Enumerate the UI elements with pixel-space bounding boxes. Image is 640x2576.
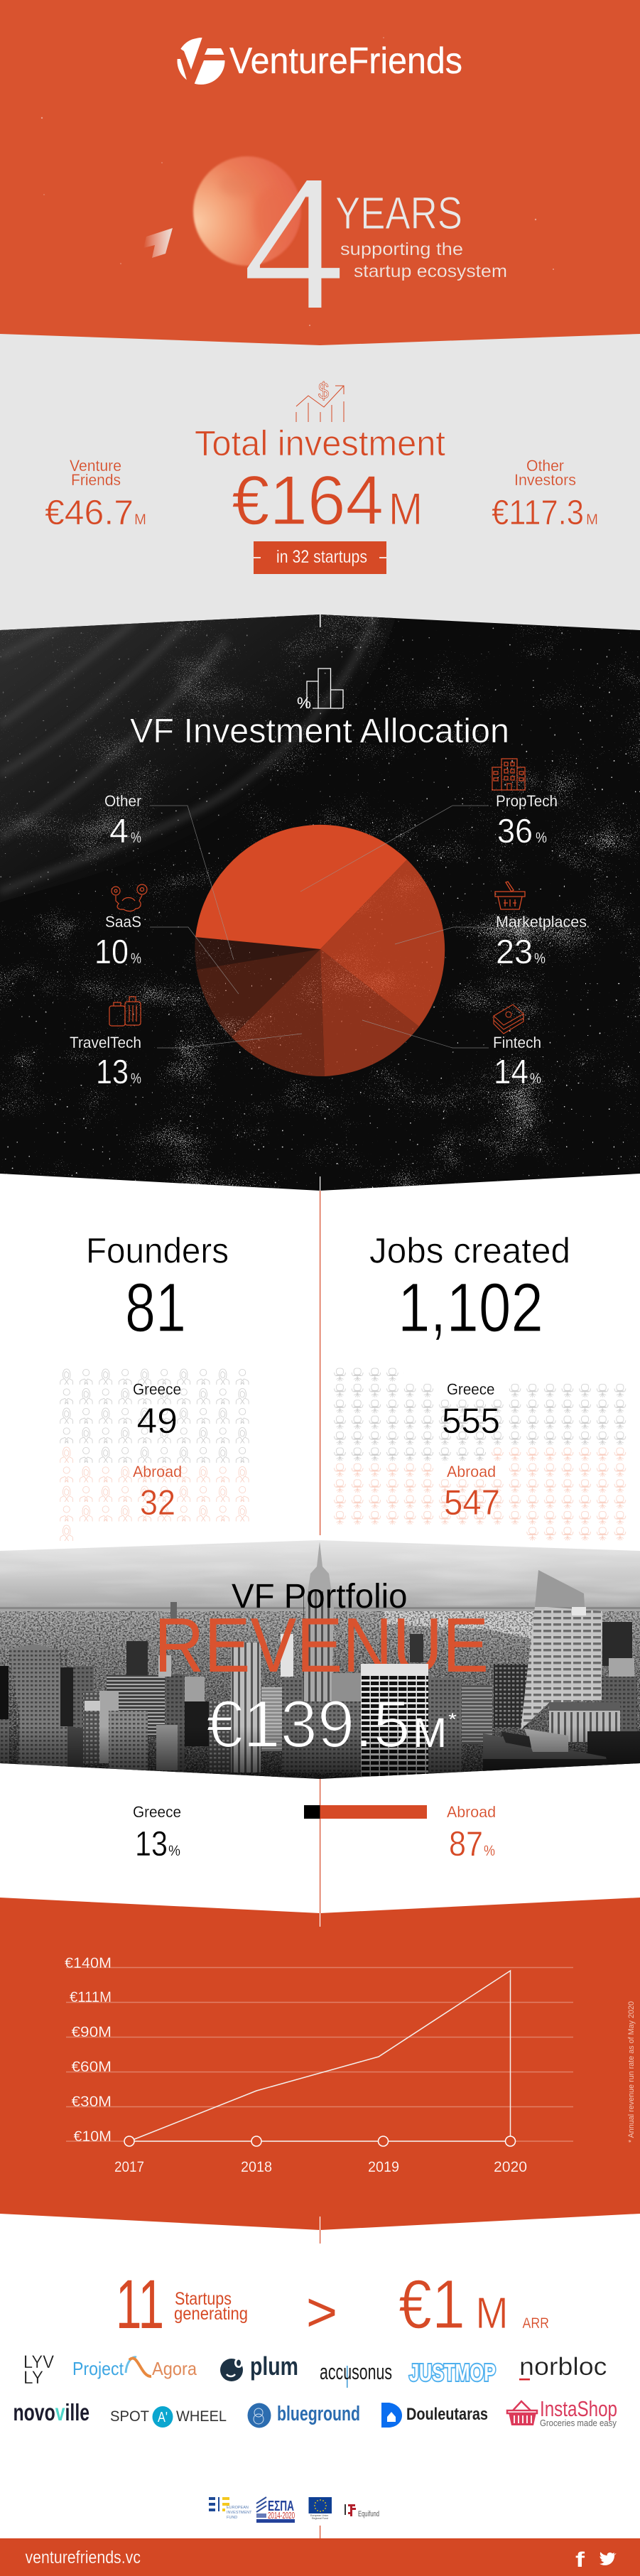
connector lines — [320, 1913, 321, 2230]
label: startups generating — [174, 2289, 248, 2324]
slice: Marketplaces 23% — [320, 860, 445, 1027]
logo: Project Agora — [72, 2357, 197, 2379]
other investors share: €117.3 — [492, 494, 584, 532]
panel: startups above 1M ARR — [13, 2230, 617, 2538]
logo: accusonus — [320, 2359, 392, 2388]
pictogram: founders — [60, 1368, 255, 1544]
founders block — [60, 1230, 255, 1544]
heading: VF investment allocation: VF Investment Allocation — [130, 713, 509, 750]
heading: jobs created: Jobs created — [369, 1230, 570, 1270]
label: Marketplaces 23%: % — [534, 951, 546, 967]
panel: founders and jobs — [60, 1176, 631, 1544]
image: dark sand background — [0, 611, 640, 1194]
leader lines — [150, 806, 489, 1048]
icon: money stack — [494, 1005, 524, 1034]
label: startups generating: Startups — [175, 2289, 232, 2309]
total value: M — [389, 485, 423, 534]
label: PropTech 36% — [496, 792, 558, 850]
x axis labels — [114, 2159, 527, 2175]
value: 1M ARR: ARR — [523, 2315, 549, 2332]
heading: VF portfolio: VF Portfolio — [232, 1578, 408, 1616]
connector top — [320, 615, 321, 627]
heading: REVENUE: REVENUE — [154, 1602, 489, 1689]
label: SaaS 10%: SaaS — [105, 913, 141, 931]
logo: ESPA 2014-2020: 2014-2020 — [268, 2510, 295, 2521]
bar: Abroad share — [320, 1805, 427, 1819]
label: Abroad 87% — [447, 1803, 496, 1863]
other investors share: Other — [526, 457, 564, 475]
heading: total investment: Total investment — [195, 423, 445, 463]
founders Greece — [133, 1380, 181, 1441]
image: moon — [193, 156, 301, 266]
logo: InstaShop — [507, 2396, 617, 2428]
y axis labels — [65, 1955, 112, 2145]
logo: Project Agora: Project — [72, 2358, 124, 2379]
heading: founders: Founders — [86, 1230, 229, 1270]
line series — [129, 1971, 510, 2141]
logo: LYVLY — [23, 2352, 54, 2388]
logo: Project Agora: Agora — [152, 2358, 197, 2379]
image: city skyline background — [0, 1538, 640, 1782]
value: revenue total: * — [448, 1710, 457, 1729]
label: Abroad 87%: % — [484, 1843, 495, 1859]
logo: blueground — [247, 2403, 360, 2428]
logo: Spot A Wheel: A' — [158, 2410, 168, 2425]
logo: InstaShop: Groceries made easy — [540, 2418, 617, 2428]
value: revenue total: €139.5 — [206, 1687, 411, 1761]
label: TravelTech 13% — [70, 1034, 141, 1091]
value: 1,102: 1,102 — [398, 1269, 543, 1346]
logo: Douleutaras: Douleutaras — [406, 2405, 488, 2424]
skyline buildings left — [0, 1542, 462, 1773]
panel: footer — [0, 2538, 640, 2576]
label: Abroad 87%: 87 — [449, 1825, 483, 1863]
x axis labels: 2020 — [494, 2159, 527, 2175]
icon: growth chart with dollar: $ — [318, 378, 329, 404]
label: Greece 13% — [133, 1803, 181, 1863]
icon: VentureFriends logo mark — [178, 38, 224, 85]
logo: Spot A Wheel: SPOT — [110, 2408, 149, 2425]
jobs block — [334, 1230, 631, 1542]
founders Abroad: 32 — [140, 1483, 175, 1522]
icon: luggage — [109, 997, 141, 1026]
stars specks — [41, 37, 554, 326]
logo: EquiFund — [345, 2504, 379, 2518]
label: PropTech 36%: % — [536, 830, 547, 846]
website: venturefriends.vc — [26, 2548, 141, 2567]
label: Abroad 87%: Abroad — [447, 1803, 496, 1821]
total value: €164 — [232, 461, 384, 539]
big number 4: 4 — [242, 139, 347, 350]
logo: Spot A Wheel: WHEEL — [176, 2408, 227, 2425]
bar: Greece share — [304, 1805, 320, 1819]
y axis labels: €90M — [71, 2024, 112, 2040]
y axis labels: €10M — [74, 2128, 112, 2145]
logo: European Union flag — [308, 2497, 332, 2520]
icon: percent bars: % — [297, 694, 311, 712]
label: TravelTech 13%: % — [131, 1071, 141, 1087]
label: startups generating: generating — [174, 2304, 248, 2324]
label: Other 4%: 4 — [109, 813, 129, 850]
tagline — [340, 239, 507, 281]
pictogram: jobs — [334, 1368, 631, 1542]
label: Marketplaces 23% — [496, 913, 587, 971]
badge: in 32 startups — [254, 541, 386, 574]
label: Other 4% — [104, 792, 141, 850]
greater than sign: > — [306, 2280, 337, 2343]
jobs Greece: Greece — [447, 1380, 494, 1398]
label: Greece 13%: % — [168, 1843, 180, 1859]
y axis labels: €140M — [65, 1955, 112, 1971]
logo: Douleutaras — [381, 2403, 488, 2428]
label: TravelTech 13%: TravelTech — [70, 1034, 141, 1051]
logo: European Union flag: European Union — [310, 2514, 328, 2517]
label: SaaS 10%: 10 — [94, 933, 129, 971]
slice: Fintech 14% — [320, 949, 419, 1076]
label: TravelTech 13%: 13 — [96, 1054, 129, 1091]
value: 11: 11 — [116, 2266, 164, 2343]
venture friends share — [45, 457, 146, 532]
label: Other 4%: % — [131, 830, 141, 846]
icon: building — [492, 759, 526, 790]
icon: percent bars — [297, 669, 343, 712]
venture friends share: M — [134, 512, 146, 528]
label: Fintech 14% — [493, 1034, 541, 1091]
label: Marketplaces 23%: 23 — [496, 933, 533, 971]
venture friends share: €46.7 — [45, 494, 134, 532]
y axis labels: €111M — [70, 1989, 112, 2006]
founders Abroad — [133, 1463, 182, 1522]
footnote: * Annual revenue run rate as of May 2020 — [627, 2001, 636, 2143]
pie chart — [195, 825, 445, 1076]
value: 81: 81 — [125, 1269, 186, 1346]
other investors share — [492, 457, 598, 532]
label: Fintech 14%: Fintech — [493, 1034, 541, 1051]
logo: plum — [220, 2352, 298, 2381]
jobs Abroad: Abroad — [447, 1463, 496, 1481]
other investors share: M — [586, 512, 598, 528]
label: SaaS 10% — [94, 913, 141, 971]
logo: Spot A Wheel — [110, 2406, 227, 2428]
logo: plum: plum — [250, 2352, 298, 2381]
label: SaaS 10%: % — [131, 951, 141, 967]
logo: ESPA 2014-2020 — [256, 2497, 295, 2523]
y axis labels: €30M — [71, 2094, 112, 2110]
slice: SaaS 10% — [197, 949, 320, 1037]
panel: revenue split — [133, 1779, 496, 1913]
other investors share: Investors — [514, 471, 576, 489]
venture friends share: Friends — [71, 471, 121, 489]
logo: LYVLY: LY — [23, 2368, 43, 2388]
chart grid — [66, 1968, 573, 2141]
logo: European Union flag: Regional Fund — [312, 2517, 328, 2520]
icon: facebook: f — [575, 2548, 585, 2572]
panel: VF portfolio revenue — [0, 1538, 640, 1782]
badge: in 32 startups: in 32 startups — [276, 547, 367, 567]
label: Other 4%: Other — [104, 792, 141, 810]
logo: LYVLY: LYV — [23, 2352, 54, 2372]
label: Greece 13%: 13 — [135, 1825, 168, 1863]
icon: basket — [495, 882, 525, 909]
logo: accusonus: accusonus — [320, 2359, 392, 2384]
logo: blueground: blueground — [277, 2403, 360, 2425]
panel: orange header — [0, 0, 640, 350]
logo: European Investment Fund: FUND — [227, 2516, 237, 2520]
slice: TravelTech 13% — [232, 949, 325, 1076]
jobs Abroad — [444, 1463, 500, 1522]
label: Fintech 14%: % — [530, 1071, 541, 1087]
value: 1M ARR: M — [476, 2289, 509, 2338]
x axis labels: 2017 — [114, 2159, 144, 2175]
value: 1M ARR — [398, 2266, 549, 2343]
founders Greece: 49 — [136, 1401, 178, 1441]
foreground building — [0, 1664, 640, 1782]
value: 1M ARR: €1 — [398, 2266, 465, 2343]
label: PropTech 36%: 36 — [497, 813, 533, 850]
x axis labels: 2019 — [368, 2159, 399, 2175]
logo: European Investment Fund: INVESTMENT — [227, 2511, 252, 2515]
icon: twitter — [600, 2552, 617, 2565]
logo: EquiFund: Equifund — [358, 2510, 379, 2518]
icon: growth chart with dollar — [296, 378, 344, 422]
icon: logo chip — [143, 228, 173, 258]
panel: VF investment allocation — [0, 611, 640, 1194]
tagline: startup ecosystem — [354, 261, 507, 281]
label: Greece 13%: Greece — [133, 1803, 181, 1821]
slice: Other 4% — [195, 937, 320, 970]
jobs Abroad: 547 — [444, 1483, 500, 1522]
jobs Greece — [442, 1380, 500, 1441]
logo: European Investment Fund — [209, 2497, 252, 2520]
logo: European Investment Fund: EUROPEAN — [227, 2506, 249, 2510]
logo: InstaShop: InstaShop — [540, 2396, 617, 2421]
YEARS: YEARS — [335, 188, 462, 239]
skyline buildings right — [410, 1570, 640, 1776]
logo: novoville: novoville — [13, 2399, 90, 2425]
y axis labels: €60M — [71, 2059, 112, 2075]
icon: SaaS cloud cogs — [112, 884, 147, 911]
slice: PropTech 36% — [195, 825, 407, 949]
logo: JustMop: JUSTMOP — [409, 2359, 496, 2386]
venture friends share: Venture — [70, 457, 121, 475]
logo wordmark: VentureFriends — [229, 40, 462, 82]
label: Fintech 14%: 14 — [494, 1054, 528, 1091]
panel: total investment — [45, 378, 598, 574]
label: Marketplaces 23%: Marketplaces — [496, 913, 587, 931]
panel: revenue line chart — [0, 1898, 640, 2230]
value: revenue total: M — [413, 1710, 447, 1756]
label: PropTech 36%: PropTech — [496, 792, 558, 810]
jobs Greece: 555 — [442, 1401, 500, 1441]
founders Abroad: Abroad — [133, 1463, 182, 1481]
logo: ESPA 2014-2020: ΕΣΠΑ — [268, 2499, 294, 2514]
panel: grey investment background — [0, 327, 640, 639]
founders Greece: Greece — [133, 1380, 181, 1398]
tagline: supporting the — [340, 239, 463, 259]
data points — [124, 2136, 516, 2146]
logo: norbloc: norbloc — [519, 2353, 607, 2381]
x axis labels: 2018 — [241, 2159, 272, 2175]
